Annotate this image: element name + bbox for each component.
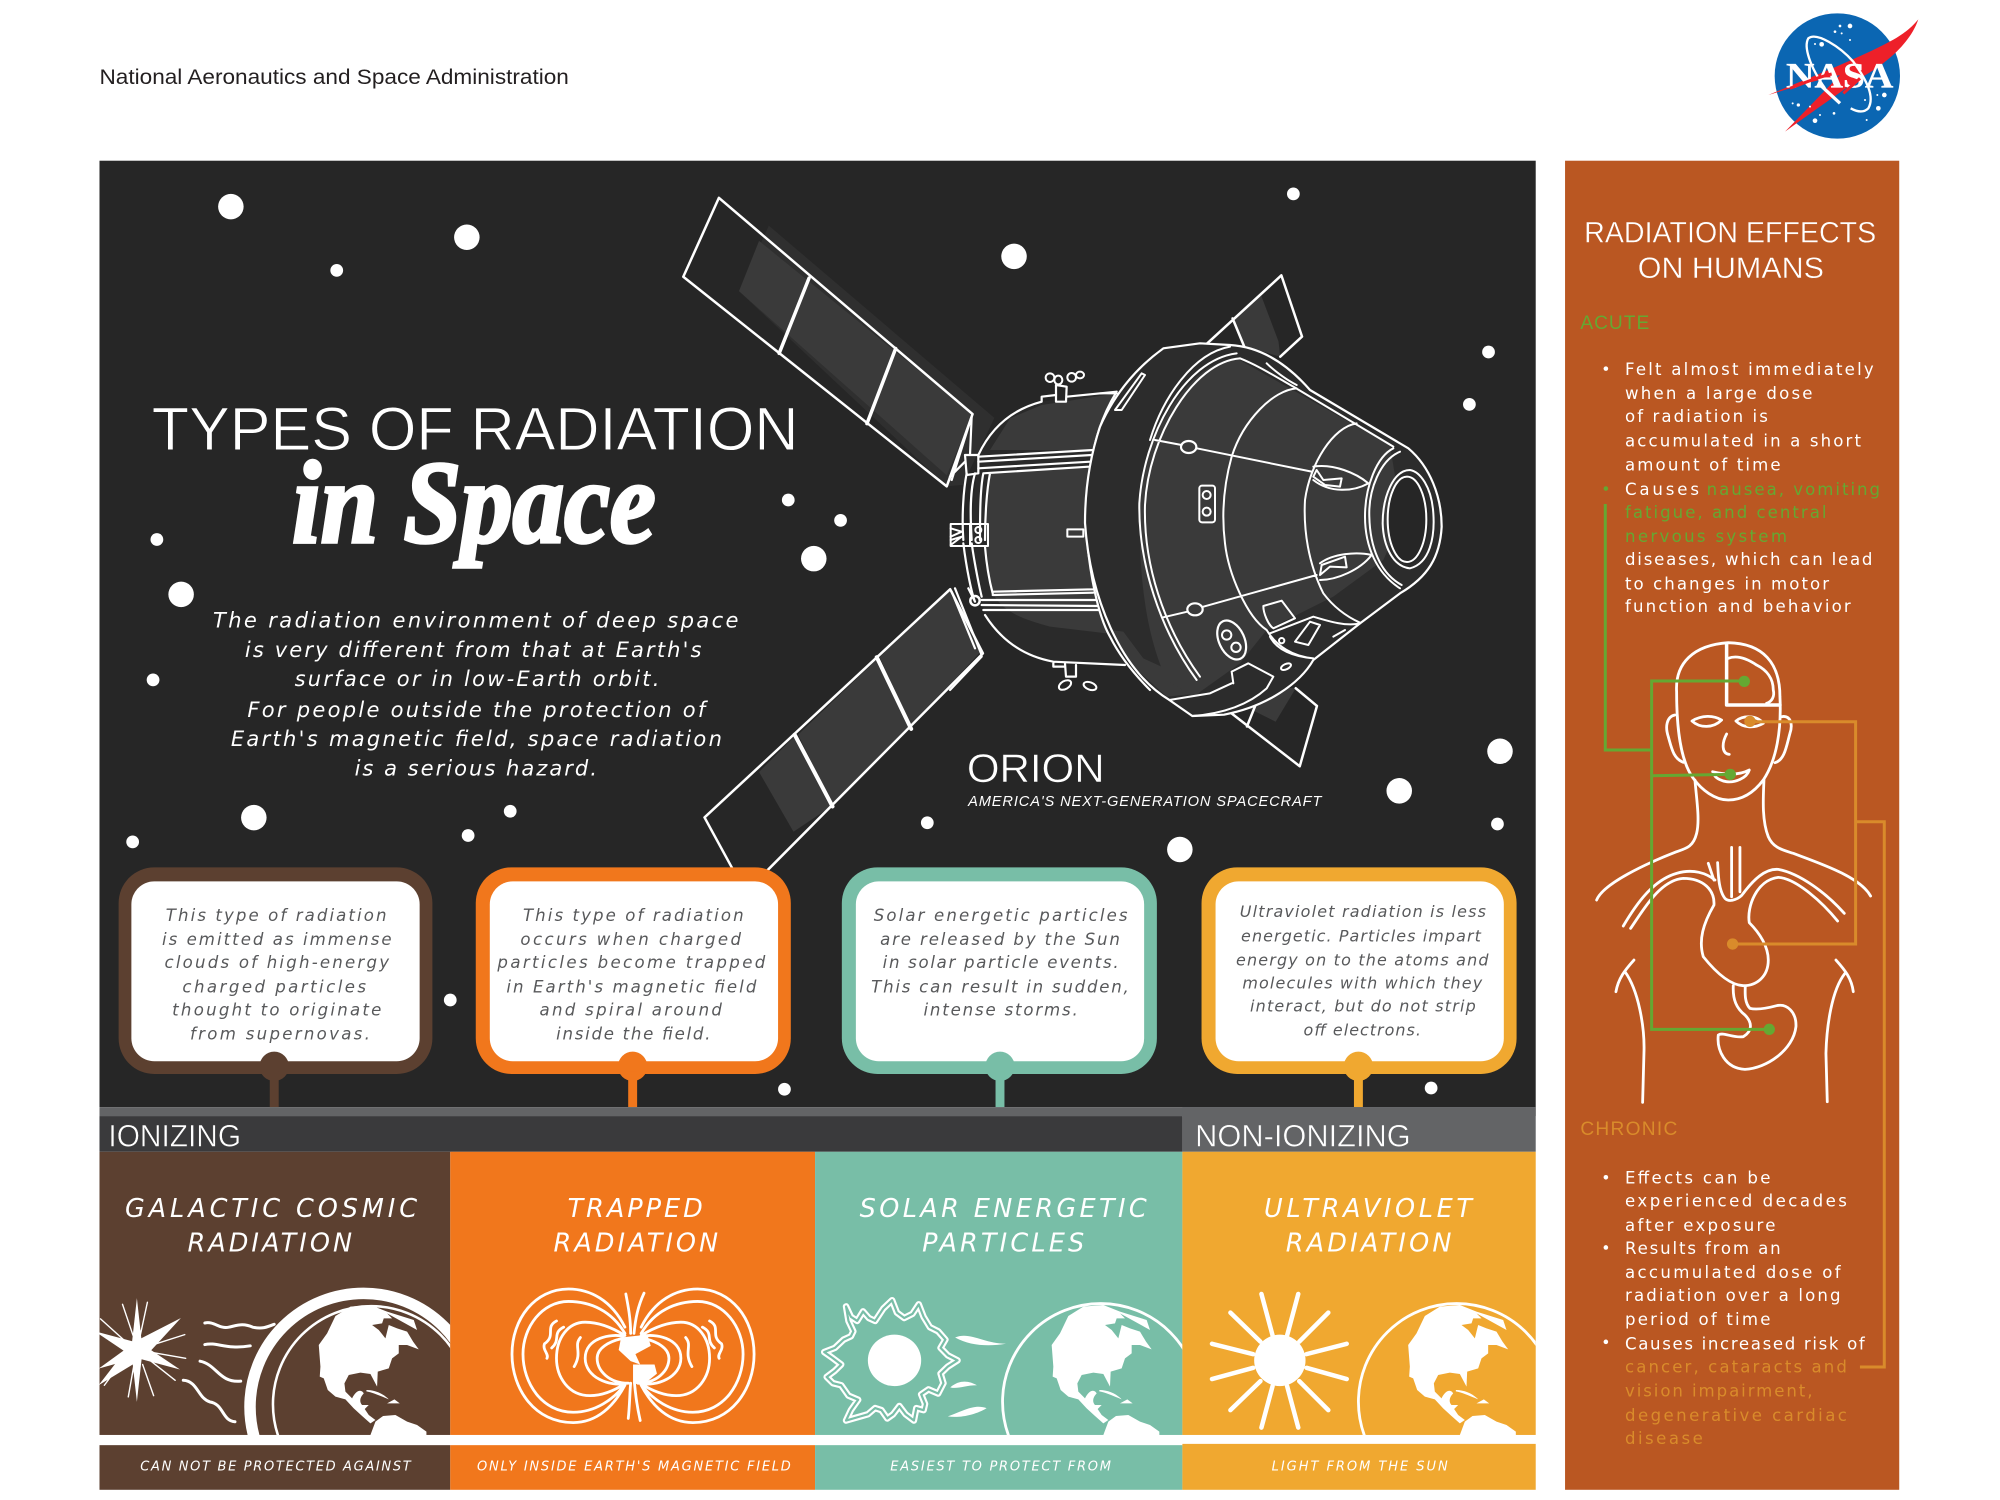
- service module: [950, 372, 1150, 692]
- chronic effects list: Results from an: [1625, 1239, 1781, 1258]
- connector: chronic effects in amber: [1727, 716, 1884, 1367]
- icon: NASA logo: [1768, 13, 1918, 139]
- strip: easiest to protect from: [815, 1445, 1182, 1490]
- spacecraft label: AMERICA'S NEXT-GENERATION SPACECRAFT: [967, 794, 1322, 810]
- panel: galactic cosmic radiation: GALACTIC COSMIC: [125, 1194, 417, 1224]
- chronic effects list: period of time: [1625, 1310, 1770, 1329]
- panel: galactic cosmic radiation: [100, 1152, 450, 1435]
- intro text block: The radiation environment of deep space: [213, 608, 739, 633]
- heading: acute: ACUTE: [1580, 313, 1649, 334]
- acute effects list: of radiation is: [1625, 407, 1768, 426]
- intro text block: Earth's magnetic field, space radiation: [231, 726, 722, 751]
- title: TYPES OF RADIATION: [152, 395, 798, 463]
- callout: trapped radiation: occurs when charged: [520, 930, 742, 949]
- callout: ultraviolet radiation: interact, but do not strip: [1250, 996, 1476, 1015]
- chronic effects list: vision impairment,: [1625, 1382, 1812, 1401]
- panel: ultraviolet radiation: ULTRAVIOLET: [1264, 1194, 1474, 1224]
- title: [152, 395, 798, 568]
- intro text block: is very different from that at Earth's: [245, 637, 702, 662]
- heading: radiation effects: RADIATION EFFECTS: [1584, 216, 1876, 249]
- intro text block: For people outside the protection of: [247, 697, 709, 722]
- chronic effects list: cancer, cataracts and: [1625, 1357, 1847, 1376]
- icon: cosmic star, waves and shielded Earth: [100, 1288, 450, 1435]
- icon: NASA logo: NASA: [1786, 55, 1893, 95]
- chronic effects list: Effects can be: [1625, 1169, 1770, 1188]
- callout: ultraviolet radiation: energy on to the atoms and: [1236, 951, 1489, 970]
- spacecraft illustration: Orion: [683, 198, 1442, 870]
- callout: trapped radiation: in Earth's magnetic field: [506, 977, 757, 996]
- acute effects list: [1604, 360, 1880, 616]
- icon: solar flares and Earth: [821, 1297, 1182, 1435]
- heading: radiation effects: [1584, 216, 1876, 285]
- crew module: [1085, 343, 1442, 716]
- intro text block: [213, 608, 739, 781]
- panel: trapped radiation: [450, 1152, 815, 1435]
- chronic effects list: after exposure: [1625, 1216, 1776, 1235]
- callout: galactic cosmic radiation: This type of radiation: [166, 906, 386, 925]
- callout: ultraviolet radiation: energetic. Particles impart: [1241, 926, 1482, 945]
- connector: acute effects in green: [1605, 504, 1775, 1035]
- acute effects list: to changes in motor: [1625, 574, 1829, 593]
- callout: trapped radiation: inside the field.: [556, 1025, 710, 1044]
- chronic effects list: experienced decades: [1625, 1192, 1847, 1211]
- callout: ultraviolet radiation: molecules with which they: [1242, 974, 1483, 993]
- panel: trapped radiation: TRAPPED: [568, 1194, 703, 1224]
- callout: galactic cosmic radiation: thought to originate: [172, 1000, 381, 1019]
- strip: light from the sun: [1182, 1444, 1536, 1490]
- chronic effects list: radiation over a long: [1625, 1286, 1841, 1305]
- acute effects list: amount of time: [1625, 456, 1781, 475]
- callout: ultraviolet radiation: [1202, 867, 1517, 1107]
- heading: radiation effects: ON HUMANS: [1638, 252, 1824, 285]
- band: non-ionizing: [1182, 1107, 1536, 1154]
- chronic effects list: degenerative cardiac: [1625, 1406, 1847, 1425]
- strip: can not be protected against: [99, 1445, 450, 1490]
- panel: trapped radiation: RADIATION: [554, 1228, 718, 1258]
- callout: galactic cosmic radiation: clouds of high-energy: [165, 953, 389, 972]
- acute effects list: fatigue, and central: [1625, 503, 1827, 522]
- acute effects list: when a large dose: [1625, 384, 1812, 403]
- callout: galactic cosmic radiation: charged particles: [182, 977, 366, 996]
- acute effects list: accumulated in a short: [1625, 431, 1861, 450]
- callout: solar energetic particles: This can result in sudden,: [871, 977, 1129, 996]
- solar panels: [683, 198, 1317, 870]
- acute effects list: Causes: [1625, 480, 1699, 499]
- callout: solar energetic particles: in solar particle events.: [883, 953, 1119, 972]
- acute effects list: nervous system: [1625, 527, 1787, 546]
- callout: trapped radiation: particles become trapped: [496, 953, 766, 972]
- acute effects list: diseases, which can lead: [1625, 550, 1872, 569]
- panel: solar energetic particles: [815, 1152, 1182, 1435]
- callout: galactic cosmic radiation: is emitted as immense: [162, 930, 392, 949]
- callout: ultraviolet radiation: off electrons.: [1304, 1021, 1421, 1040]
- panel: ultraviolet radiation: RADIATION: [1286, 1228, 1452, 1258]
- chronic effects list: Causes increased risk of: [1625, 1334, 1866, 1353]
- icon: Earth magnetic field: [512, 1289, 754, 1423]
- callout: solar energetic particles: Solar energetic particles: [874, 906, 1128, 925]
- band: ionizing: IONIZING: [108, 1118, 241, 1154]
- strip: easiest to protect from: EASIEST TO PROTECT FROM: [890, 1460, 1111, 1475]
- acute effects list: function and behavior: [1625, 597, 1851, 616]
- header text: National Aeronautics and Space Administration: [99, 64, 569, 89]
- intro text block: surface or in low-Earth orbit.: [295, 666, 659, 691]
- chronic effects list: accumulated dose of: [1625, 1263, 1842, 1282]
- callout: galactic cosmic radiation: [119, 867, 432, 1107]
- icon: sun and Earth: [1210, 1292, 1536, 1435]
- spacecraft label: [967, 747, 1322, 810]
- panel: radiation effects on humans: [1565, 161, 1899, 1490]
- acute effects list: Felt almost immediately: [1625, 360, 1874, 379]
- heading: chronic: CHRONIC: [1580, 1119, 1677, 1140]
- band: non-ionizing: NON-IONIZING: [1195, 1118, 1411, 1154]
- title: in Space: [292, 438, 656, 568]
- strip: can not be protected against: CAN NOT BE PROTECTED AGAINST: [140, 1460, 412, 1475]
- chronic effects list: [1604, 1169, 1866, 1448]
- callout: solar energetic particles: intense storms.: [923, 1000, 1078, 1019]
- intro text block: is a serious hazard.: [355, 756, 597, 781]
- callout: trapped radiation: and spiral around: [540, 1000, 722, 1019]
- chronic effects list: disease: [1625, 1429, 1703, 1448]
- strip: only inside Earth's magnetic field: [450, 1445, 815, 1490]
- strip: light from the sun: LIGHT FROM THE SUN: [1272, 1460, 1448, 1475]
- callout: trapped radiation: [476, 867, 791, 1107]
- strip: only inside Earth's magnetic field: ONLY INSIDE EARTH'S MAGNETIC FIELD: [477, 1460, 791, 1475]
- panel: solar energetic particles: PARTICLES: [922, 1228, 1084, 1258]
- callout: ultraviolet radiation: Ultraviolet radiation is less: [1240, 902, 1486, 921]
- panel: ultraviolet radiation: [1182, 1152, 1536, 1435]
- panel: galactic cosmic radiation: RADIATION: [188, 1228, 352, 1258]
- callout: trapped radiation: This type of radiation: [523, 906, 744, 925]
- stars: [126, 188, 1513, 1096]
- band: ionizing: [99, 1107, 1536, 1154]
- panel: solar energetic particles: SOLAR ENERGETIC: [860, 1194, 1147, 1224]
- acute effects list: nausea, vomiting: [1707, 480, 1880, 499]
- callout: solar energetic particles: [842, 867, 1157, 1107]
- spacecraft label: ORION: [967, 747, 1105, 791]
- callout: solar energetic particles: are released by the Sun: [880, 930, 1120, 949]
- callout: galactic cosmic radiation: from supernovas.: [190, 1025, 370, 1044]
- panel: dark space background: [99, 161, 1536, 1107]
- body diagram: [1597, 504, 1884, 1367]
